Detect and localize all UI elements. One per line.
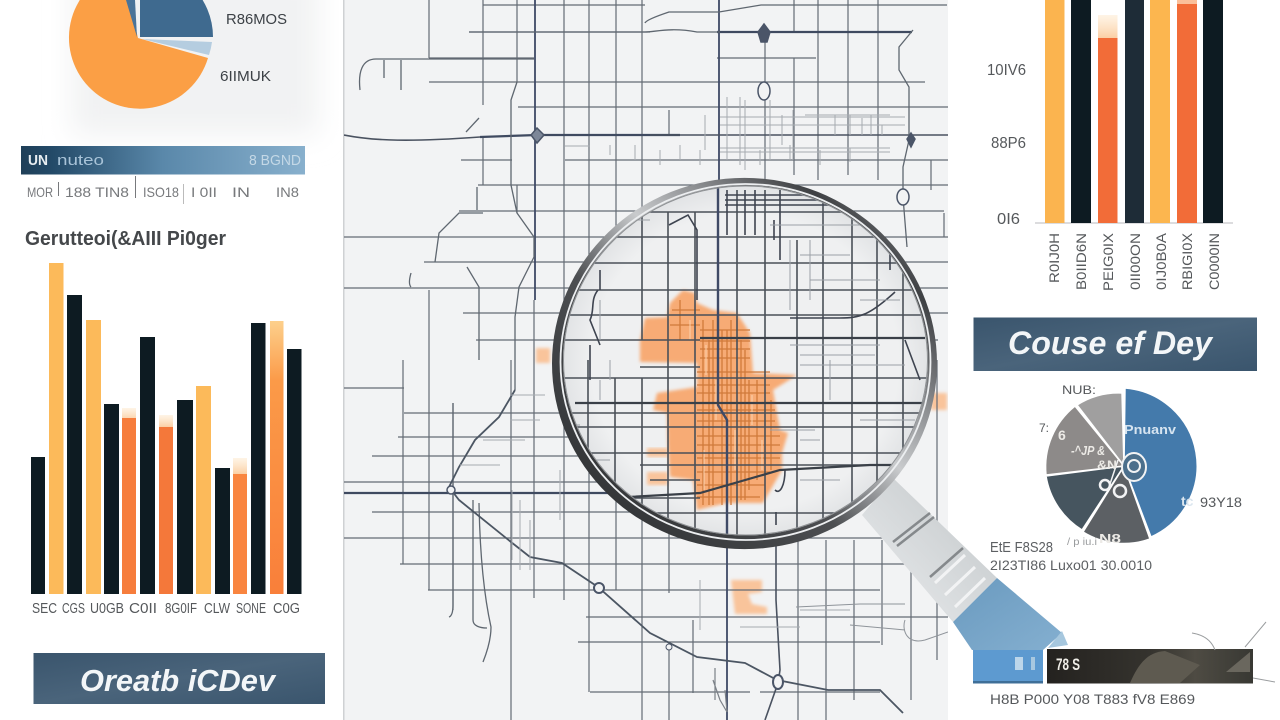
road grid: main arteries (535, 0, 727, 720)
bar chart: top right (987, 0, 1233, 291)
chart category labels (1046, 232, 1222, 291)
pie chart: cause of delay: -^JP & (1071, 443, 1105, 458)
pie chart: top left: 6IIMUK (220, 69, 271, 85)
pie chart caption: / p iu.i (1067, 537, 1097, 548)
bar chart: left (31, 263, 302, 617)
stat bar: blue header: nuteo (57, 152, 104, 169)
bar chart labels (32, 601, 300, 617)
orange area: outside the lens (536, 348, 947, 614)
pie chart caption: EtE F8S28 (990, 539, 1053, 556)
stat bars: bottom right: 78 S (1056, 655, 1080, 674)
heading: bar chart title: Gerutteoi(&AIII Pi0ger (25, 228, 226, 250)
chart axis values: 10IV6 (987, 62, 1026, 79)
panel: street map (343, 0, 948, 720)
handle grip (953, 578, 1062, 650)
bar chart labels: C0II (129, 601, 157, 617)
junctions (447, 24, 915, 689)
pie chart: cause of delay: &N (1097, 458, 1117, 472)
chart axis values: 0I6 (997, 211, 1020, 228)
pie chart: cause of delay: 7: (1039, 421, 1049, 435)
stat bars caption: H8B P000 Y08 T883 fV8 E869 (990, 691, 1195, 707)
orange street texture (670, 300, 780, 505)
stat bar labels: I 0II (191, 184, 217, 200)
bar chart labels: SONE (236, 601, 266, 617)
stat bar labels: IN8 (276, 184, 299, 200)
pie chart: cause of delay: tc (1181, 493, 1194, 509)
pie chart: cause of delay: NUB: (1062, 383, 1096, 397)
banner: right: Couse ef Dey (1008, 325, 1214, 361)
pie chart: cause of delay: N8 (1099, 531, 1121, 546)
chart axis values: 88P6 (991, 135, 1026, 152)
chart category labels: R0IJ0H (1046, 233, 1062, 283)
chart category labels: RBIGI0X (1179, 232, 1195, 290)
chart category labels: 0II00ON (1127, 233, 1143, 290)
stat bar: blue header: 8 BGND (249, 152, 301, 169)
banner: right (974, 318, 1257, 371)
stat bars: bottom right (973, 622, 1275, 684)
banner: left (34, 653, 325, 704)
chart category labels: C0000IN (1206, 233, 1222, 290)
chart category labels: 0IJ0B0A (1153, 232, 1169, 290)
chart category labels: B0IID6N (1073, 233, 1089, 290)
bar chart labels: U0GB (90, 601, 124, 617)
panel: left charts (21, 0, 325, 704)
stat bar labels (27, 176, 299, 204)
magnified lens (550, 178, 937, 549)
lens fine detail (565, 220, 915, 480)
bar chart labels: CLW (204, 601, 230, 617)
pie chart: cause of delay: 6 (1058, 427, 1066, 443)
minor street detail (460, 97, 905, 630)
lens ring (552, 178, 937, 549)
pie chart caption: 2I23TI86 Luxo01 30.0010 (990, 557, 1152, 573)
banner: left: Oreatb iCDev (80, 663, 277, 698)
stat bar: blue header (21, 146, 305, 174)
chart axis values (987, 62, 1026, 228)
lens streets (550, 190, 930, 540)
pie chart caption (990, 537, 1152, 573)
pie chart: cause of delay: 93Y18 (1200, 495, 1242, 510)
pie chart: cause of delay: Pnuanv (1124, 422, 1177, 437)
road grid: outer streets (344, 0, 948, 720)
stat bar labels: IN (232, 184, 250, 200)
orange heat area (640, 290, 797, 510)
bar chart labels: SEC (32, 601, 57, 617)
chart category labels: PEIG0IX (1100, 232, 1116, 291)
pie chart: top left: R86MOS (226, 12, 287, 28)
icon: magnifying glass handle (862, 478, 1068, 650)
curved roads (360, 5, 947, 662)
stat bar labels: MOR (27, 184, 53, 200)
stat bar: blue header: UN (28, 152, 48, 169)
pie centre marks (1100, 453, 1146, 497)
pie chart: cause of delay (1039, 383, 1242, 546)
bar chart labels: C0G (273, 601, 300, 617)
bar chart labels: CGS (62, 601, 85, 617)
bar chart labels: 8G0IF (165, 601, 197, 617)
stat bar labels: 188 TIN8 (65, 184, 129, 200)
pie chart: top left (69, 0, 287, 109)
stat bar labels: ISO18 (143, 184, 179, 200)
